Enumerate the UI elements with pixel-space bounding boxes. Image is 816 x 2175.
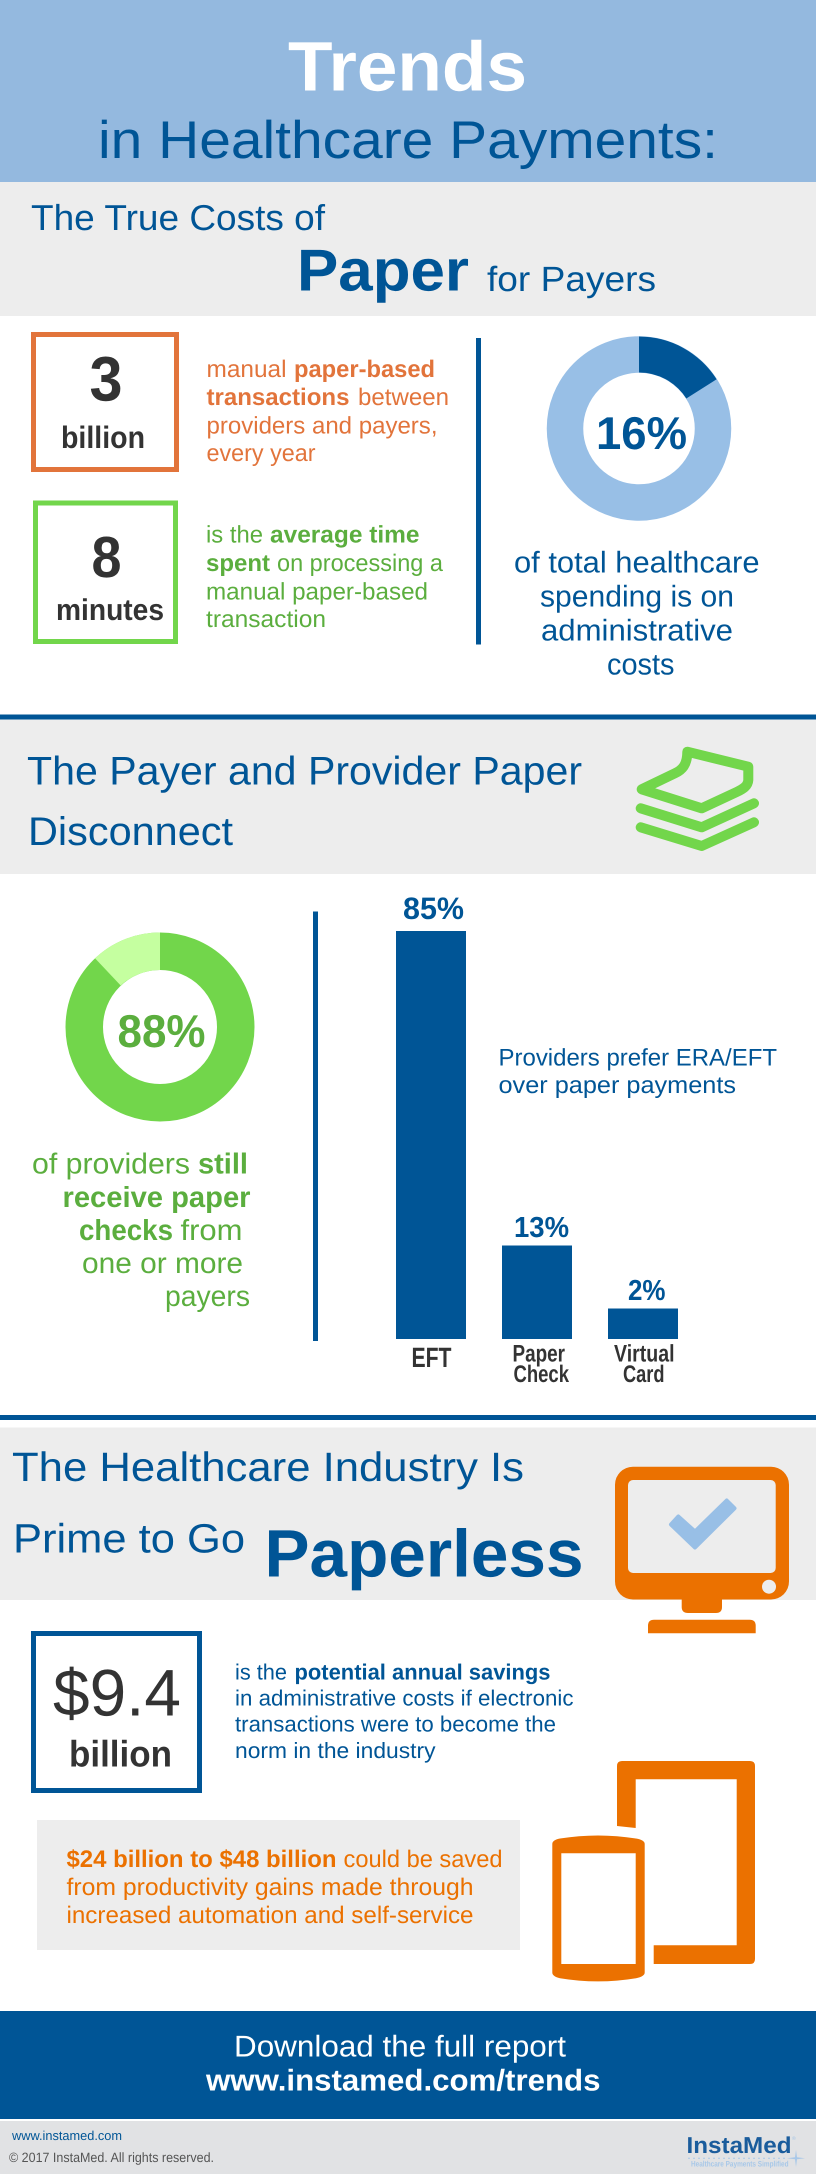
text: of total healthcare spending: spending is on xyxy=(540,580,734,614)
text: of providers still receive paper checks: payers xyxy=(165,1281,250,1313)
text: potential annual savings: potential annual savings xyxy=(294,1660,550,1684)
donut chart: 88% xyxy=(84,932,236,1103)
section heading: The Payer and Provider Paper Disconnect xyxy=(0,714,816,874)
section heading: The Payer and Provider Paper Disconnect: The Payer and Provider Paper xyxy=(27,750,582,794)
callout: productivity savings: from productivity gains made through xyxy=(66,1874,474,1901)
text: manual paper-based transactions: every year xyxy=(206,440,316,467)
text: manual paper-based transactions: between xyxy=(358,384,449,411)
text: of providers still receive paper checks: checks xyxy=(79,1215,173,1247)
text: potential annual savings: transactions were to become the xyxy=(235,1712,556,1736)
stat box: $9.4 billion: $9.4 xyxy=(53,1656,181,1730)
icon: computer monitor with check xyxy=(615,1467,789,1633)
logo: InstaMed xyxy=(686,2132,805,2169)
divider: section two xyxy=(313,912,318,1341)
text: average time spent: is the xyxy=(206,522,263,548)
text: manual paper-based transactions: transactions xyxy=(206,384,350,411)
icon: tablet and phone xyxy=(552,1761,755,1981)
callout: productivity savings xyxy=(37,1820,520,1950)
stat box: 8 minutes xyxy=(36,503,176,642)
section heading: The True Costs of Paper for Payers: for Payers xyxy=(487,260,656,299)
section heading: The True Costs of Paper for Payers xyxy=(0,182,816,316)
donut chart: 16% xyxy=(565,336,717,502)
text: average time spent xyxy=(206,522,444,633)
section heading: The Healthcare Industry Is Prime to Go Paperless: The Healthcare Industry Is xyxy=(12,1444,524,1490)
text: manual paper-based transactions xyxy=(206,356,449,467)
bar: Paper Check 13% xyxy=(502,1212,572,1388)
logo: InstaMed: InstaMed xyxy=(686,2132,792,2158)
stat box: 3 billion: 3 xyxy=(90,344,122,414)
bar chart: payment preference xyxy=(396,891,678,1388)
text: of providers still receive paper checks: of providers xyxy=(32,1148,190,1180)
section heading: The Payer and Provider Paper Disconnect: Disconnect xyxy=(28,810,233,854)
text: average time spent: average time xyxy=(270,522,420,548)
call to action: download the full report: Download the full report xyxy=(234,2030,567,2064)
bar: EFT 85%: EFT xyxy=(412,1342,452,1373)
logo: InstaMed: ® xyxy=(792,2136,796,2142)
text: of total healthcare spending: administrative xyxy=(541,614,733,648)
text: potential annual savings: is the xyxy=(235,1660,287,1684)
callout: productivity savings: increased automation and self-service xyxy=(66,1902,474,1929)
logo: InstaMed: Healthcare Payments Simplified xyxy=(691,2160,789,2169)
text: providers prefer ERA/EFT: over paper payments xyxy=(498,1072,736,1099)
copyright: © 2017 InstaMed. All rights reserved. xyxy=(9,2150,214,2165)
text: of total healthcare spending: of total healthcare xyxy=(514,546,760,580)
text: manual paper-based transactions: paper-based xyxy=(294,356,435,383)
bar: Virtual Card 2% xyxy=(608,1275,678,1388)
callout: productivity savings: $24 billion to $48 billion xyxy=(66,1846,336,1873)
call to action: download the full report xyxy=(0,2011,816,2119)
text: average time spent: manual paper-based xyxy=(206,578,428,606)
text: potential annual savings: norm in the industry xyxy=(235,1738,436,1763)
stat box: 3 billion xyxy=(34,334,176,470)
text: average time spent: spent xyxy=(206,550,270,577)
text: of providers still receive paper checks: receive paper xyxy=(62,1182,250,1214)
text: potential annual savings xyxy=(235,1660,574,1763)
bar: EFT 85% xyxy=(396,891,466,1373)
section heading: The Healthcare Industry Is Prime to Go Paperless: Prime to Go xyxy=(13,1516,245,1562)
text: average time spent: on processing a xyxy=(277,550,444,577)
footer link: www.instamed.com xyxy=(11,2128,122,2143)
bar: Virtual Card 2%: 2% xyxy=(628,1275,666,1307)
header: title banner xyxy=(0,0,816,182)
section heading: The Healthcare Industry Is Prime to Go Paperless: Paperless xyxy=(264,1516,584,1592)
donut chart: 16%: 16% xyxy=(596,407,687,459)
section heading: The True Costs of Paper for Payers: The True Costs of xyxy=(31,197,326,238)
divider: section rule xyxy=(0,1415,816,1420)
text: manual paper-based transactions: manual xyxy=(206,356,286,383)
text: average time spent: transaction xyxy=(206,606,326,633)
footer xyxy=(0,2121,816,2174)
text: of total healthcare spending xyxy=(514,546,760,682)
stat box: 8 minutes: 8 xyxy=(92,525,122,590)
divider: section one xyxy=(476,338,481,644)
section heading: The True Costs of Paper for Payers: Paper xyxy=(297,238,469,304)
bar: EFT 85%: 85% xyxy=(403,891,464,926)
text: providers prefer ERA/EFT xyxy=(498,1044,777,1099)
text: manual paper-based transactions: providers and payers, xyxy=(206,412,438,440)
bar: Paper Check 13%: 13% xyxy=(514,1212,569,1244)
bar: Paper Check 13%: Paper xyxy=(512,1340,565,1368)
text: of providers still receive paper checks: from xyxy=(180,1215,242,1247)
text: of providers still receive paper checks xyxy=(32,1148,250,1313)
donut chart: 88%: 88% xyxy=(118,1005,206,1057)
call to action: download the full report: www.instamed.com/trends xyxy=(205,2064,601,2098)
text: of providers still receive paper checks: still xyxy=(198,1148,248,1180)
text: of total healthcare spending: costs xyxy=(607,648,674,682)
text: providers prefer ERA/EFT: Providers prefer ERA/EFT xyxy=(498,1044,777,1072)
icon: paper stack xyxy=(641,752,754,846)
bar: Virtual Card 2%: Card xyxy=(623,1361,664,1388)
section heading: The Healthcare Industry Is Prime to Go Paperless xyxy=(0,1428,816,1600)
stat box: $9.4 billion: billion xyxy=(69,1734,172,1774)
text: of providers still receive paper checks: one or more xyxy=(82,1248,243,1280)
stat box: 3 billion: billion xyxy=(61,420,145,455)
stat box: $9.4 billion xyxy=(34,1634,200,1790)
stat box: 8 minutes: minutes xyxy=(56,594,164,627)
callout: productivity savings: could be saved xyxy=(344,1846,502,1873)
bar: Paper Check 13%: Check xyxy=(514,1361,569,1388)
subtitle: in Healthcare Payments: in Healthcare Payments: xyxy=(98,111,718,170)
text: potential annual savings: in administrative costs if electronic xyxy=(235,1686,574,1710)
title: Trends: Trends xyxy=(288,28,527,106)
bar: Virtual Card 2%: Virtual xyxy=(614,1340,674,1368)
